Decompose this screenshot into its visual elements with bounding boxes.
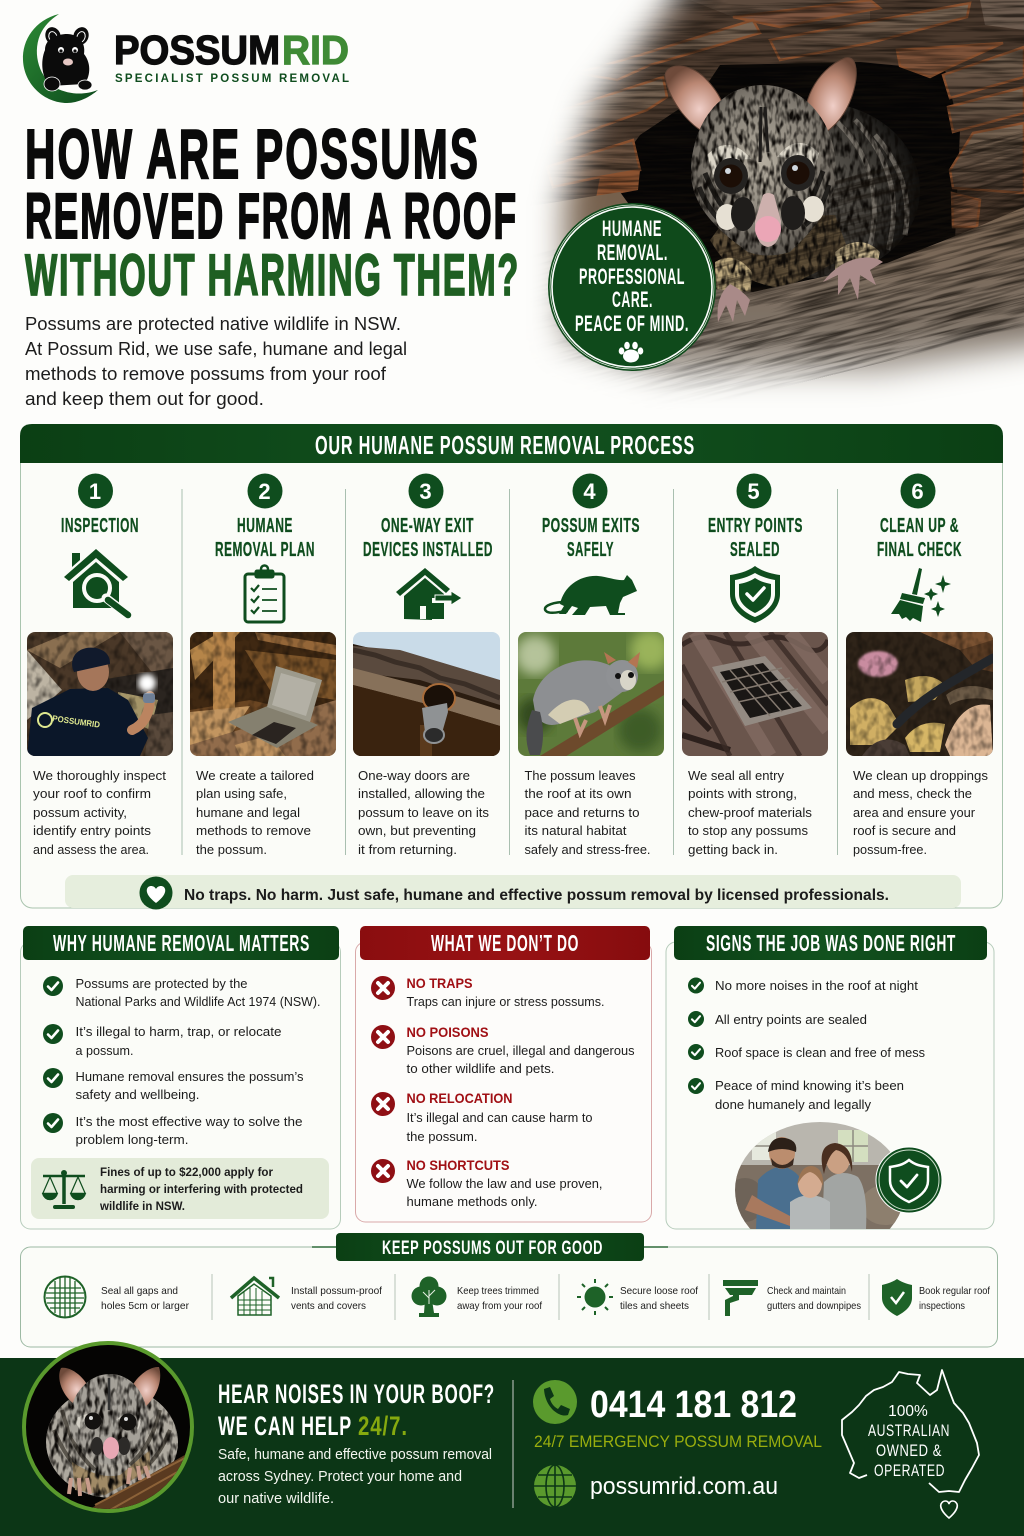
badge: humane removal: PEACE OF MIND. xyxy=(575,311,689,336)
no relocation: NO RELOCATION xyxy=(406,1090,512,1106)
tip: gutters and downpipes: Check and maintain xyxy=(767,1285,846,1297)
panel: why humane removal matters xyxy=(20,926,340,1229)
icon: globe xyxy=(534,1465,576,1507)
step 3 text xyxy=(358,768,489,857)
step 1: inspection: INSPECTION xyxy=(61,515,139,537)
badge: humane removal xyxy=(548,203,716,371)
heading xyxy=(360,926,650,960)
logo possum mark xyxy=(42,25,92,91)
website: possumrid.com.au xyxy=(590,1473,778,1500)
no relocation: It’s illegal and can cause harm to xyxy=(406,1110,592,1125)
step 2: humane removal plan: 2 xyxy=(258,479,272,504)
icon: scales of justice xyxy=(42,1170,86,1207)
photo: technician inspecting roof xyxy=(27,632,173,756)
step 4: possum exits safely: 4 xyxy=(583,479,597,504)
step 1 text: your roof to confirm xyxy=(33,786,151,801)
tip: roof inspections: inspections xyxy=(919,1300,965,1312)
main title xyxy=(25,115,520,308)
intro paragraph xyxy=(25,313,407,409)
check list: All entry points are sealed xyxy=(715,1012,867,1027)
step 3 text: it from returning. xyxy=(358,842,457,857)
check list: It’s the most effective way to solve the xyxy=(76,1114,302,1129)
step 6 text: possum-free. xyxy=(853,842,927,857)
no poisons: NO POISONS xyxy=(406,1024,488,1040)
heading xyxy=(312,1233,668,1261)
photo: possum portrait xyxy=(24,1343,192,1522)
no poisons xyxy=(371,1024,635,1076)
badge: humane removal: REMOVAL. xyxy=(597,240,668,265)
logo crescent xyxy=(23,14,98,103)
step 6: clean up and final check xyxy=(846,474,993,857)
step 1 text: and assess the area. xyxy=(33,842,149,857)
tip: trim trees: away from your roof xyxy=(457,1300,542,1312)
tip: vents and covers xyxy=(231,1278,382,1315)
step 5: entry points sealed: 5 xyxy=(747,479,761,504)
tip: gutters and downpipes: gutters and downpipes xyxy=(767,1300,861,1312)
panel: keep possums out for good xyxy=(20,1233,998,1347)
no shortcuts xyxy=(371,1157,602,1209)
heading: KEEP POSSUMS OUT FOR GOOD xyxy=(382,1237,603,1259)
step 1 text: possum activity, xyxy=(33,805,127,820)
process heading xyxy=(20,424,1003,463)
step 4 text: safely and stress-free. xyxy=(524,842,650,857)
step 2: humane removal plan: HUMANE xyxy=(237,515,293,537)
emergency line: 24/7 EMERGENCY POSSUM REMOVAL xyxy=(534,1432,822,1451)
possum face xyxy=(691,85,836,256)
check list: safety and wellbeing. xyxy=(76,1087,200,1102)
step 1 text xyxy=(33,768,166,857)
roof planks xyxy=(547,0,1024,227)
heading: WHY HUMANE REMOVAL MATTERS xyxy=(53,930,310,956)
footer paragraph: our native wildlife. xyxy=(218,1491,334,1507)
step 2 text xyxy=(196,768,314,857)
intro paragraph: Possums are protected native wildlife in NSW. xyxy=(25,313,401,334)
step 2: humane removal plan: REMOVAL PLAN xyxy=(215,539,315,561)
step 4: possum exits safely: SAFELY xyxy=(567,539,614,561)
step 2 text: We create a tailored xyxy=(196,768,314,783)
panel: signs the job was done right xyxy=(666,926,994,1229)
footer paragraph: Safe, humane and effective possum removal xyxy=(218,1447,492,1463)
photo: technician inspecting roof: POSSUMRID xyxy=(52,713,101,730)
step 5 text xyxy=(688,768,812,857)
callout: fines: wildlife in NSW. xyxy=(99,1199,185,1213)
icon: shield badge xyxy=(876,1147,942,1213)
check list: No more noises in the roof at night xyxy=(715,978,918,993)
check list: done humanely and legally xyxy=(715,1097,871,1112)
step 6: clean up and final check: FINAL CHECK xyxy=(877,539,962,561)
photo: sealed roof vent xyxy=(682,632,828,756)
no relocation xyxy=(371,1090,592,1144)
main title: WITHOUT HARMING THEM? xyxy=(25,243,520,308)
tip: vents and covers: Install possum-proof xyxy=(291,1285,382,1297)
check list: National Parks and Wildlife Act 1974 (NSW). xyxy=(76,994,320,1009)
step 6 text: and mess, check the xyxy=(853,786,972,801)
dark roof hole xyxy=(600,62,960,295)
hero photo: possum peeking from a damaged roof xyxy=(538,0,1024,398)
step 3 text: installed, allowing the xyxy=(358,786,485,801)
heading: WHAT WE DON’T DO xyxy=(431,930,579,956)
phone number: 0414 181 812 xyxy=(590,1384,797,1426)
tip: trim trees: Keep trees trimmed xyxy=(457,1285,539,1297)
main title: HOW ARE POSSUMS xyxy=(25,115,480,193)
badge: Australian owned: AUSTRALIAN xyxy=(868,1421,950,1440)
photo: attic with inspection box xyxy=(190,632,336,756)
badge: Australian owned: 100% xyxy=(888,1403,928,1420)
badge: humane removal: CARE. xyxy=(612,287,653,312)
step 4 text: its natural habitat xyxy=(524,823,627,838)
step 3: one-way exit devices installed xyxy=(353,474,500,857)
tip: secure roof tiles xyxy=(577,1279,698,1315)
step 4 text: pace and returns to xyxy=(524,805,640,820)
check list xyxy=(43,976,320,1147)
tip: vents and covers: vents and covers xyxy=(291,1300,366,1312)
wooden ledge xyxy=(546,192,1024,394)
icon: clipboard checklist xyxy=(245,566,284,622)
intro paragraph: At Possum Rid, we use safe, humane and legal xyxy=(25,338,407,359)
check list: Peace of mind knowing it’s been xyxy=(715,1078,904,1093)
step 2 text: the possum. xyxy=(196,842,267,857)
icon: house with magnifier xyxy=(64,549,128,615)
step 6 text xyxy=(853,768,988,857)
tip: trim trees xyxy=(412,1276,542,1317)
step 2: humane removal plan xyxy=(190,474,336,857)
step 6: clean up and final check: 6 xyxy=(911,479,925,504)
main title: REMOVED FROM A ROOF xyxy=(25,180,518,252)
step 3: one-way exit devices installed: ONE-WAY EXIT xyxy=(381,515,474,537)
step 1: inspection xyxy=(27,474,173,857)
icon: house with exit arrow xyxy=(396,568,462,620)
no poisons: Poisons are cruel, illegal and dangerous xyxy=(406,1043,635,1058)
check list xyxy=(688,978,925,1112)
child xyxy=(790,1195,830,1229)
badge: Australian owned: OPERATED xyxy=(874,1461,945,1480)
tip: seal gaps xyxy=(44,1276,189,1318)
possum body xyxy=(710,102,920,300)
step 2 text: humane and legal xyxy=(196,805,300,820)
brand name: POSSUM xyxy=(114,27,280,73)
icon: broom and sparkles xyxy=(891,568,951,622)
icon: gutter xyxy=(723,1280,758,1316)
photo: one-way door on roof xyxy=(353,632,500,760)
step 1 text: identify entry points xyxy=(33,823,151,838)
badge: humane removal: PROFESSIONAL xyxy=(579,264,685,289)
footer headline: 24/7. xyxy=(358,1411,408,1441)
icon: mesh circle xyxy=(44,1276,86,1318)
check list: Roof space is clean and free of mess xyxy=(715,1045,925,1060)
tip: roof inspections xyxy=(882,1279,990,1316)
tip: gutters and downpipes xyxy=(723,1280,861,1316)
icon: shield with check xyxy=(730,566,780,623)
no relocation: the possum. xyxy=(406,1129,478,1144)
step 5 text: getting back in. xyxy=(688,842,778,857)
icon: heart xyxy=(140,876,172,910)
photo: happy family xyxy=(735,1122,900,1229)
no poisons: to other wildlife and pets. xyxy=(406,1061,554,1076)
father xyxy=(756,1166,808,1229)
tip: seal gaps: Seal all gaps and xyxy=(101,1285,178,1297)
step 1: inspection: 1 xyxy=(89,479,102,504)
step 6: clean up and final check: CLEAN UP & xyxy=(880,515,959,537)
footer paragraph: across Sydney. Protect your home and xyxy=(218,1469,462,1485)
step 3: one-way exit devices installed: DEVICES INSTALLED xyxy=(363,539,493,561)
icon: tree xyxy=(412,1276,446,1317)
icon: sun xyxy=(577,1279,613,1315)
panel: humane possum removal process xyxy=(20,424,1003,910)
step 1 text: We thoroughly inspect xyxy=(33,768,166,783)
callout: no traps banner: No traps. No harm. Just safe, humane and effective possum removal by licensed professionals. xyxy=(184,887,889,904)
step 3 text: possum to leave on its xyxy=(358,805,489,820)
no shortcuts: humane methods only. xyxy=(406,1194,538,1209)
check list: Possums are protected by the xyxy=(76,976,248,991)
tip: secure roof tiles: tiles and sheets xyxy=(620,1300,689,1312)
footer headline xyxy=(218,1379,495,1441)
possum ears xyxy=(664,66,722,130)
step 4: possum exits safely xyxy=(515,474,670,857)
icon: paw xyxy=(619,342,643,362)
step 4 text: The possum leaves xyxy=(524,768,636,783)
step 5 text: We seal all entry xyxy=(688,768,784,783)
panel: what we don't do xyxy=(356,926,652,1222)
step 6 text: area and ensure your xyxy=(853,805,976,820)
badge: humane removal: HUMANE xyxy=(602,216,662,241)
heading xyxy=(23,926,339,960)
callout: fines: Fines of up to $22,000 apply for xyxy=(100,1165,273,1179)
step 3: one-way exit devices installed: 3 xyxy=(419,479,433,504)
step 3 text: One-way doors are xyxy=(358,768,470,783)
step 4: possum exits safely: POSSUM EXITS xyxy=(542,515,640,537)
check list: It’s illegal to harm, trap, or relocate xyxy=(76,1024,282,1039)
no shortcuts: We follow the law and use proven, xyxy=(406,1176,602,1191)
step 5 text: points with strong, xyxy=(688,786,797,801)
tip: secure roof tiles: Secure loose roof xyxy=(620,1285,698,1297)
step 5: entry points sealed xyxy=(682,474,828,857)
photo: roof clean up xyxy=(846,632,993,756)
no traps: NO TRAPS xyxy=(406,975,472,991)
no shortcuts: NO SHORTCUTS xyxy=(406,1157,510,1173)
check list: Humane removal ensures the possum’s xyxy=(76,1069,304,1084)
footer headline: WE CAN HELP xyxy=(218,1411,352,1441)
icon: phone xyxy=(533,1380,577,1424)
intro paragraph: and keep them out for good. xyxy=(25,388,264,409)
check list: a possum. xyxy=(76,1043,134,1058)
tip: seal gaps: holes 5cm or larger xyxy=(101,1300,189,1312)
step 4 text xyxy=(524,768,650,857)
brand tagline: SPECIALIST POSSUM REMOVAL xyxy=(115,73,349,85)
heading xyxy=(674,926,987,960)
step 2 text: methods to remove xyxy=(196,823,311,838)
step 6 text: We clean up droppings xyxy=(853,768,988,783)
mother xyxy=(822,1173,866,1229)
badge: Australian owned: OWNED & xyxy=(876,1441,942,1460)
step 4 text: the roof at its own xyxy=(524,786,632,801)
step 2 text: plan using safe, xyxy=(196,786,287,801)
step 5: entry points sealed: SEALED xyxy=(730,539,780,561)
callout: fines xyxy=(31,1158,329,1219)
process heading: OUR HUMANE POSSUM REMOVAL PROCESS xyxy=(315,430,695,460)
icon: heart outline xyxy=(941,1501,957,1518)
intro paragraph: methods to remove possums from your roof xyxy=(25,363,387,384)
icon: house vent xyxy=(231,1278,279,1315)
icon: Australia outline xyxy=(842,1370,979,1492)
tip: roof inspections: Book regular roof xyxy=(919,1285,990,1297)
badge: Australian owned xyxy=(842,1370,979,1518)
possum claws xyxy=(718,284,750,322)
step 5: entry points sealed: ENTRY POINTS xyxy=(708,515,803,537)
check list: problem long-term. xyxy=(76,1132,188,1147)
step 3 text: own, but preventing xyxy=(358,823,476,838)
callout: fines: harming or interfering with protected xyxy=(100,1182,303,1196)
icon: possum silhouette xyxy=(545,575,637,615)
icon: shield xyxy=(882,1279,912,1316)
footer band xyxy=(0,1343,1024,1536)
logo: Possum Rid: RID xyxy=(282,27,349,73)
no traps xyxy=(371,975,604,1009)
step 6 text: roof is secure and xyxy=(853,823,956,838)
no traps: Traps can injure or stress possums. xyxy=(406,994,604,1009)
footer paragraph xyxy=(218,1447,492,1507)
step 5 text: to stop any possums xyxy=(688,823,808,838)
step 5 text: chew-proof materials xyxy=(688,805,812,820)
logo: Possum Rid xyxy=(23,14,349,103)
footer headline: HEAR NOISES IN YOUR BOOF? xyxy=(218,1379,495,1409)
photo: possum on branch xyxy=(518,632,664,756)
callout: no traps banner xyxy=(65,875,961,910)
